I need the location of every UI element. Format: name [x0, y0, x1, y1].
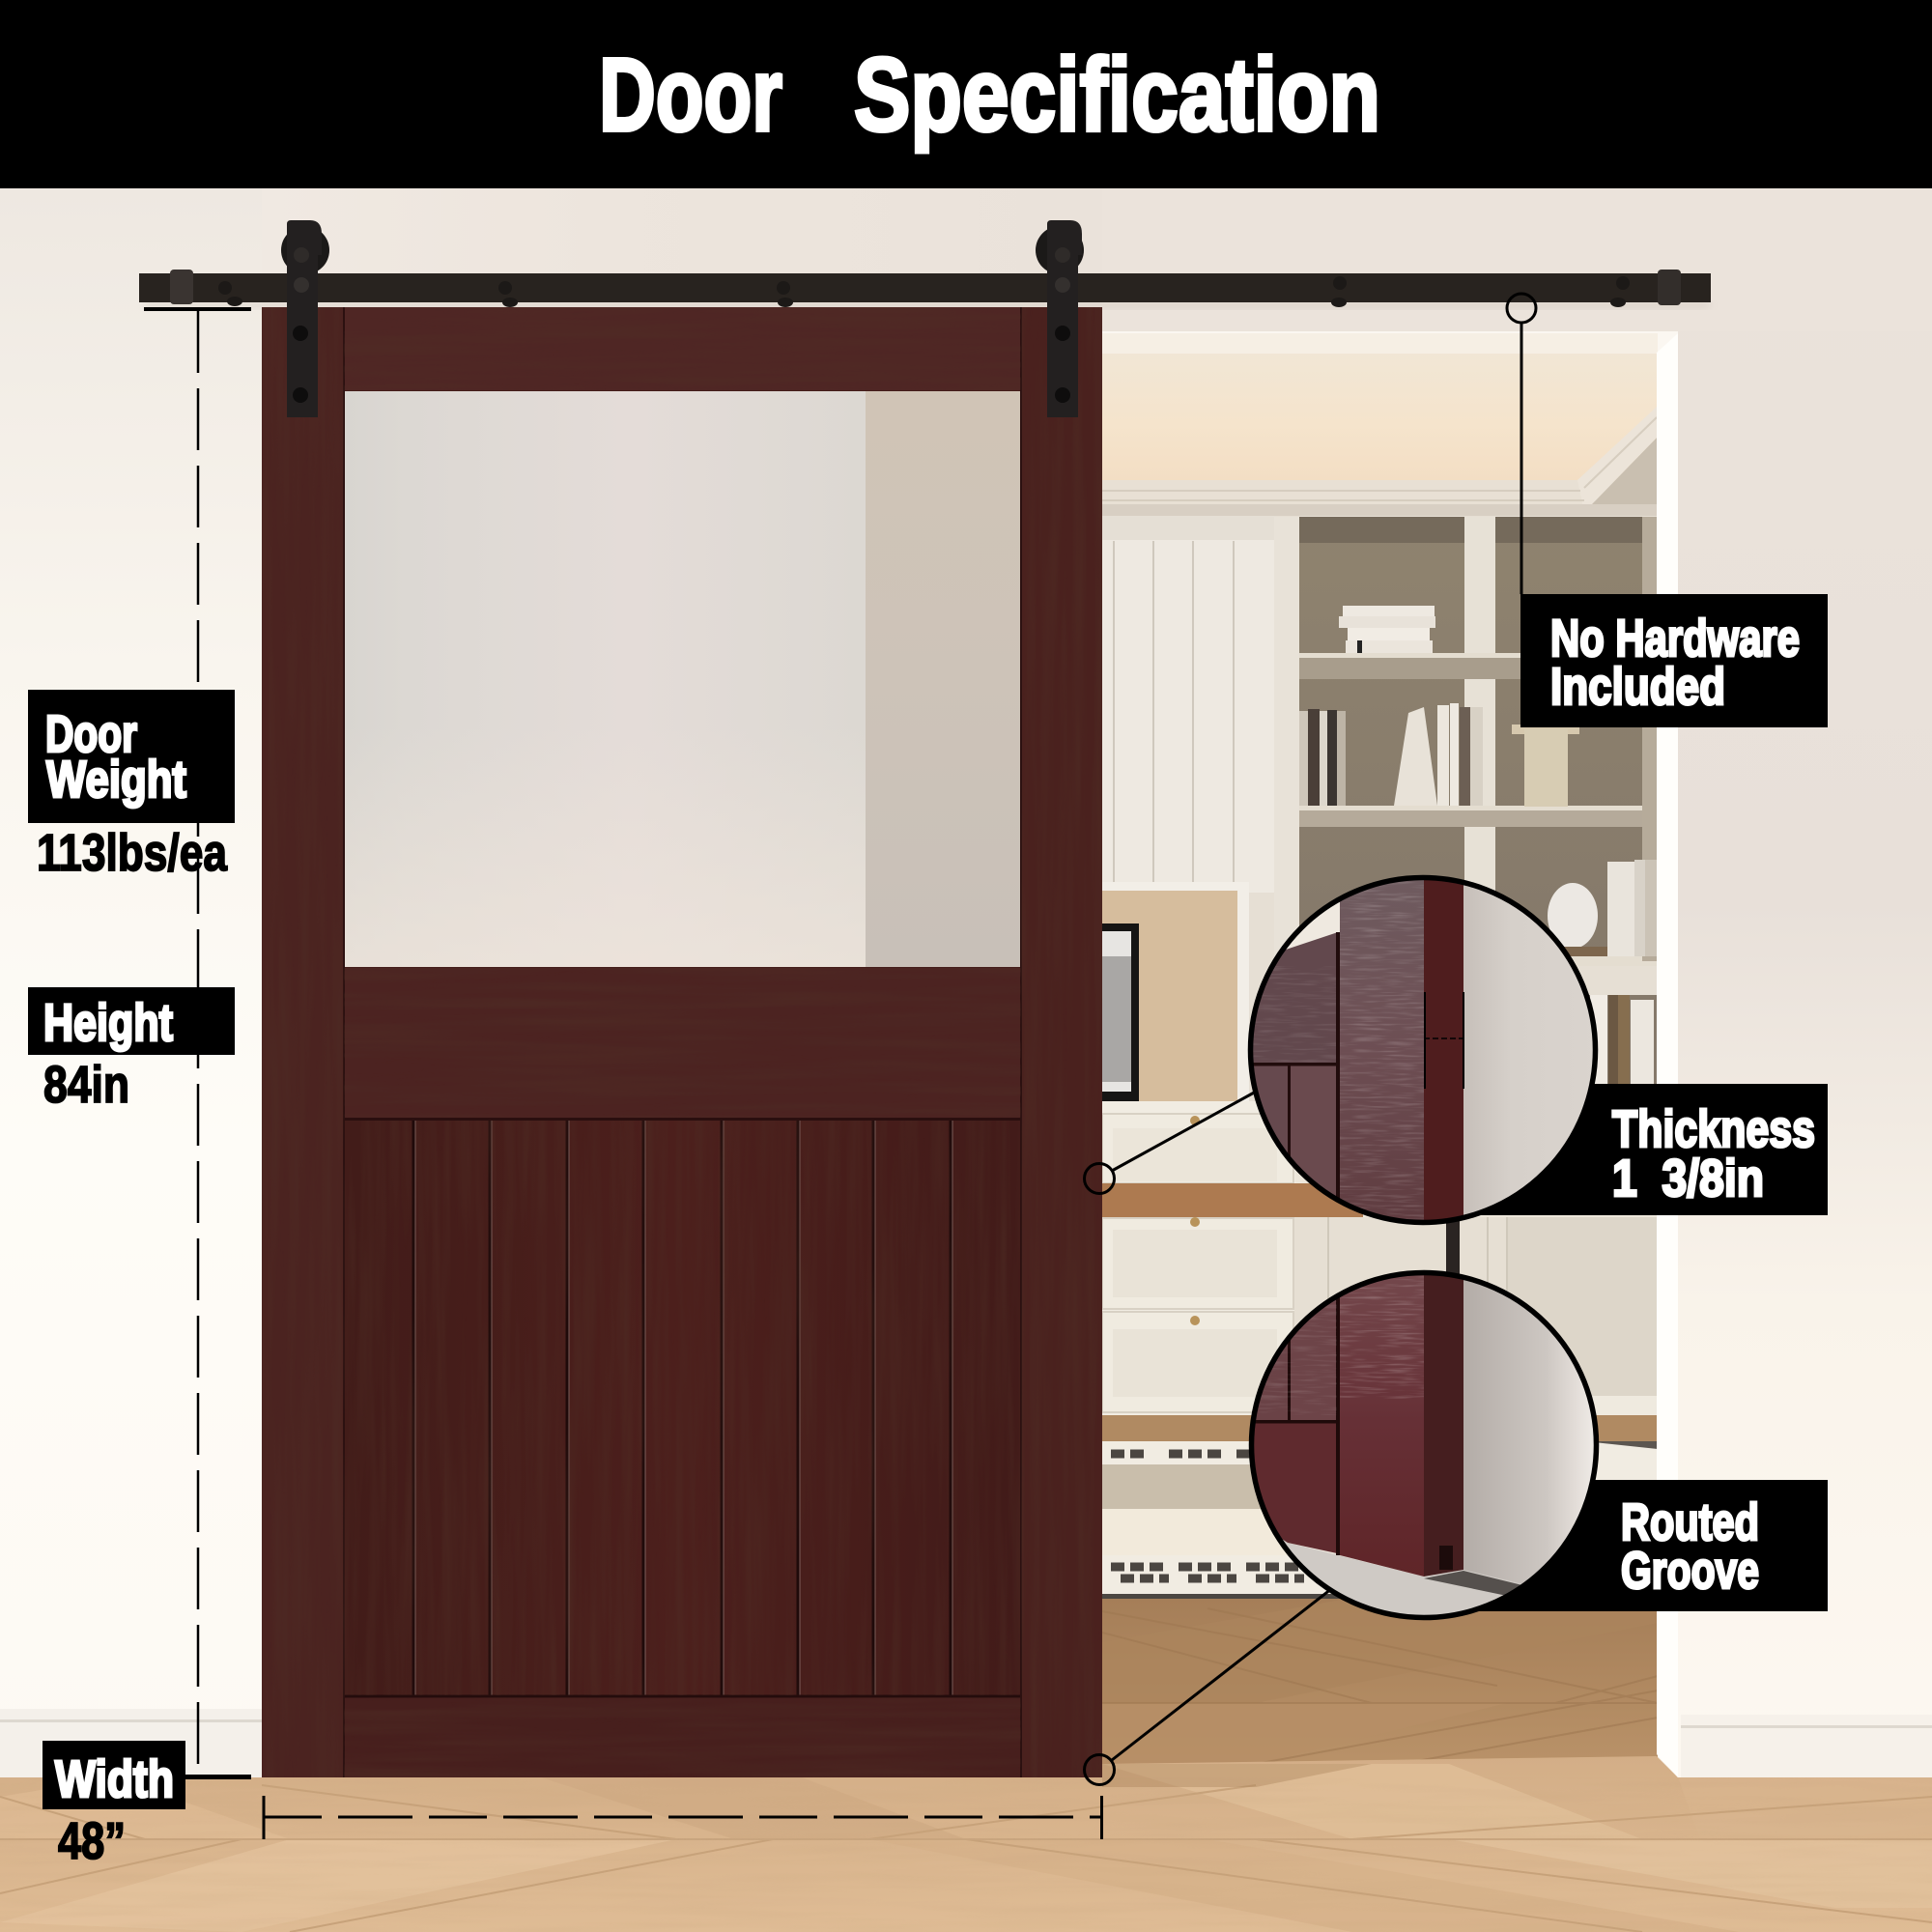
header bar: [0, 0, 1932, 188]
width dimension line: [263, 1796, 1103, 1839]
left stop: [170, 270, 193, 304]
foreground floor: [0, 1756, 1932, 1932]
label: no hardware included: Included: [1550, 658, 1725, 716]
right wall: [1678, 188, 1932, 1777]
label bar: routed groove: Groove: [1621, 1542, 1759, 1600]
interior floor: [1102, 1415, 1658, 1444]
title: Specification: [854, 36, 1380, 153]
label: no hardware included: [1507, 294, 1828, 727]
bottom rail: [344, 1697, 1021, 1777]
sculpture: [1512, 724, 1579, 807]
glass window: [345, 391, 1021, 967]
label: width: [43, 1741, 185, 1870]
label: width: 48”: [58, 1812, 126, 1870]
label bar: routed groove: Routed: [1621, 1493, 1759, 1551]
left wall: [0, 188, 262, 1777]
cabinet right side: [1294, 1217, 1658, 1415]
books top shelf: [1339, 606, 1435, 653]
doorway jamb: [1657, 333, 1678, 1777]
connector: routed groove detail: [1084, 1589, 1331, 1785]
label: height: Height: [43, 994, 173, 1052]
right hanger: [1036, 220, 1084, 417]
left hanger: [281, 220, 329, 417]
right stop: [1658, 270, 1681, 305]
height dimension line: [144, 307, 251, 1779]
vertical planks: [344, 1121, 1020, 1695]
bookcase lower back: [1299, 966, 1348, 1111]
magnifier: routed groove: [1246, 1265, 1604, 1633]
label: door weight: [28, 690, 235, 882]
baseboards: [0, 1709, 1932, 1777]
middle rail: [344, 968, 1021, 1118]
right stile: [1021, 307, 1102, 1777]
books middle shelf: [1299, 703, 1483, 806]
magnifier: door thickness: [1246, 869, 1603, 1236]
floor boards: [0, 1764, 1932, 1932]
top rail: [344, 307, 1021, 390]
label bar: thickness: [1478, 1084, 1828, 1215]
vase and books lower shelf: [1548, 860, 1658, 1092]
connector: thickness detail: [1084, 1092, 1256, 1194]
title: [599, 36, 1380, 153]
title: Door: [599, 36, 782, 153]
left stile: [262, 307, 344, 1777]
label bar: thickness: 1 3/8in: [1612, 1150, 1764, 1208]
label bar: routed groove: [1478, 1480, 1828, 1611]
label: door weight: Weight: [46, 751, 186, 809]
label: height: 84in: [43, 1056, 129, 1114]
track shadow on wall: [145, 301, 1710, 309]
wood counter: [1102, 1183, 1363, 1217]
label: width: Width: [55, 1750, 174, 1808]
label: door weight: 113lbs/ea: [37, 824, 228, 882]
cabinet drawers: [1102, 1101, 1295, 1420]
label: height: [28, 987, 235, 1114]
rug: [1102, 1441, 1658, 1599]
track bolts: [218, 276, 1630, 307]
label bar: thickness: Thickness: [1612, 1100, 1815, 1158]
interior room seen through doorway: [1102, 333, 1658, 1776]
barn door: [262, 307, 1102, 1777]
framed art: [1102, 882, 1249, 1101]
hardware track: [139, 220, 1711, 417]
label: door weight: Door: [45, 705, 137, 763]
label: no hardware included: No Hardware: [1550, 610, 1800, 668]
